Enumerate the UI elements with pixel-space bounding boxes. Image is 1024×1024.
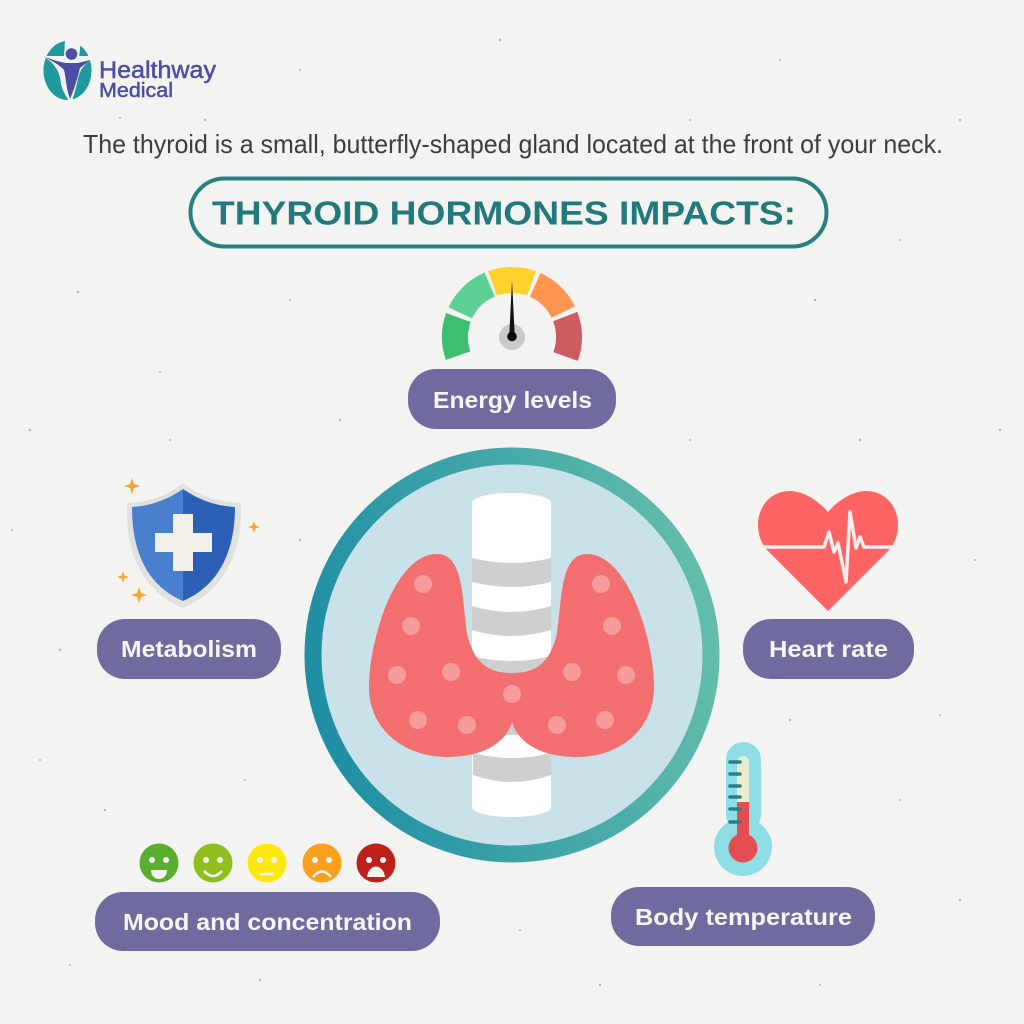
logo wordmark: Medical bbox=[99, 80, 173, 102]
pill: Body temperature bbox=[611, 887, 875, 946]
pill: Metabolism: Metabolism bbox=[121, 636, 257, 662]
face: laughing bbox=[140, 844, 178, 882]
icon: thyroid in circle bbox=[313, 456, 711, 854]
pill: Energy levels: Energy levels bbox=[433, 387, 592, 413]
face: smiling bbox=[194, 844, 232, 882]
logo wordmark: Healthway bbox=[99, 57, 216, 84]
pill: Mood and concentration bbox=[95, 892, 440, 951]
icon: energy gauge bbox=[455, 280, 569, 356]
logo wordmark bbox=[99, 57, 216, 102]
face: sad bbox=[302, 844, 342, 882]
pill: Metabolism bbox=[97, 619, 281, 679]
pill: Mood and concentration: Mood and concentration bbox=[123, 909, 412, 935]
icon: mood faces bbox=[140, 844, 396, 882]
pill: Heart rate bbox=[743, 619, 914, 679]
ring bbox=[313, 456, 711, 854]
icon: logo figure bbox=[43, 39, 92, 101]
title: THYROID HORMONES IMPACTS: bbox=[212, 194, 796, 232]
icon: heart with pulse bbox=[758, 491, 898, 611]
trachea bbox=[472, 493, 551, 817]
title pill bbox=[190, 178, 826, 246]
logo: Healthway Medical bbox=[43, 39, 216, 102]
intro sentence: The thyroid is a small, butterfly-shaped gland located at the front of your neck. bbox=[83, 129, 943, 159]
pill: Body temperature: Body temperature bbox=[635, 904, 852, 930]
icon: thermometer bbox=[714, 742, 772, 876]
face: upset bbox=[356, 844, 396, 882]
face: neutral bbox=[248, 844, 286, 882]
thyroid gland bbox=[369, 554, 654, 757]
icon: shield with cross bbox=[117, 478, 260, 608]
pill: Heart rate: Heart rate bbox=[769, 636, 888, 662]
pill: Energy levels bbox=[408, 369, 616, 429]
